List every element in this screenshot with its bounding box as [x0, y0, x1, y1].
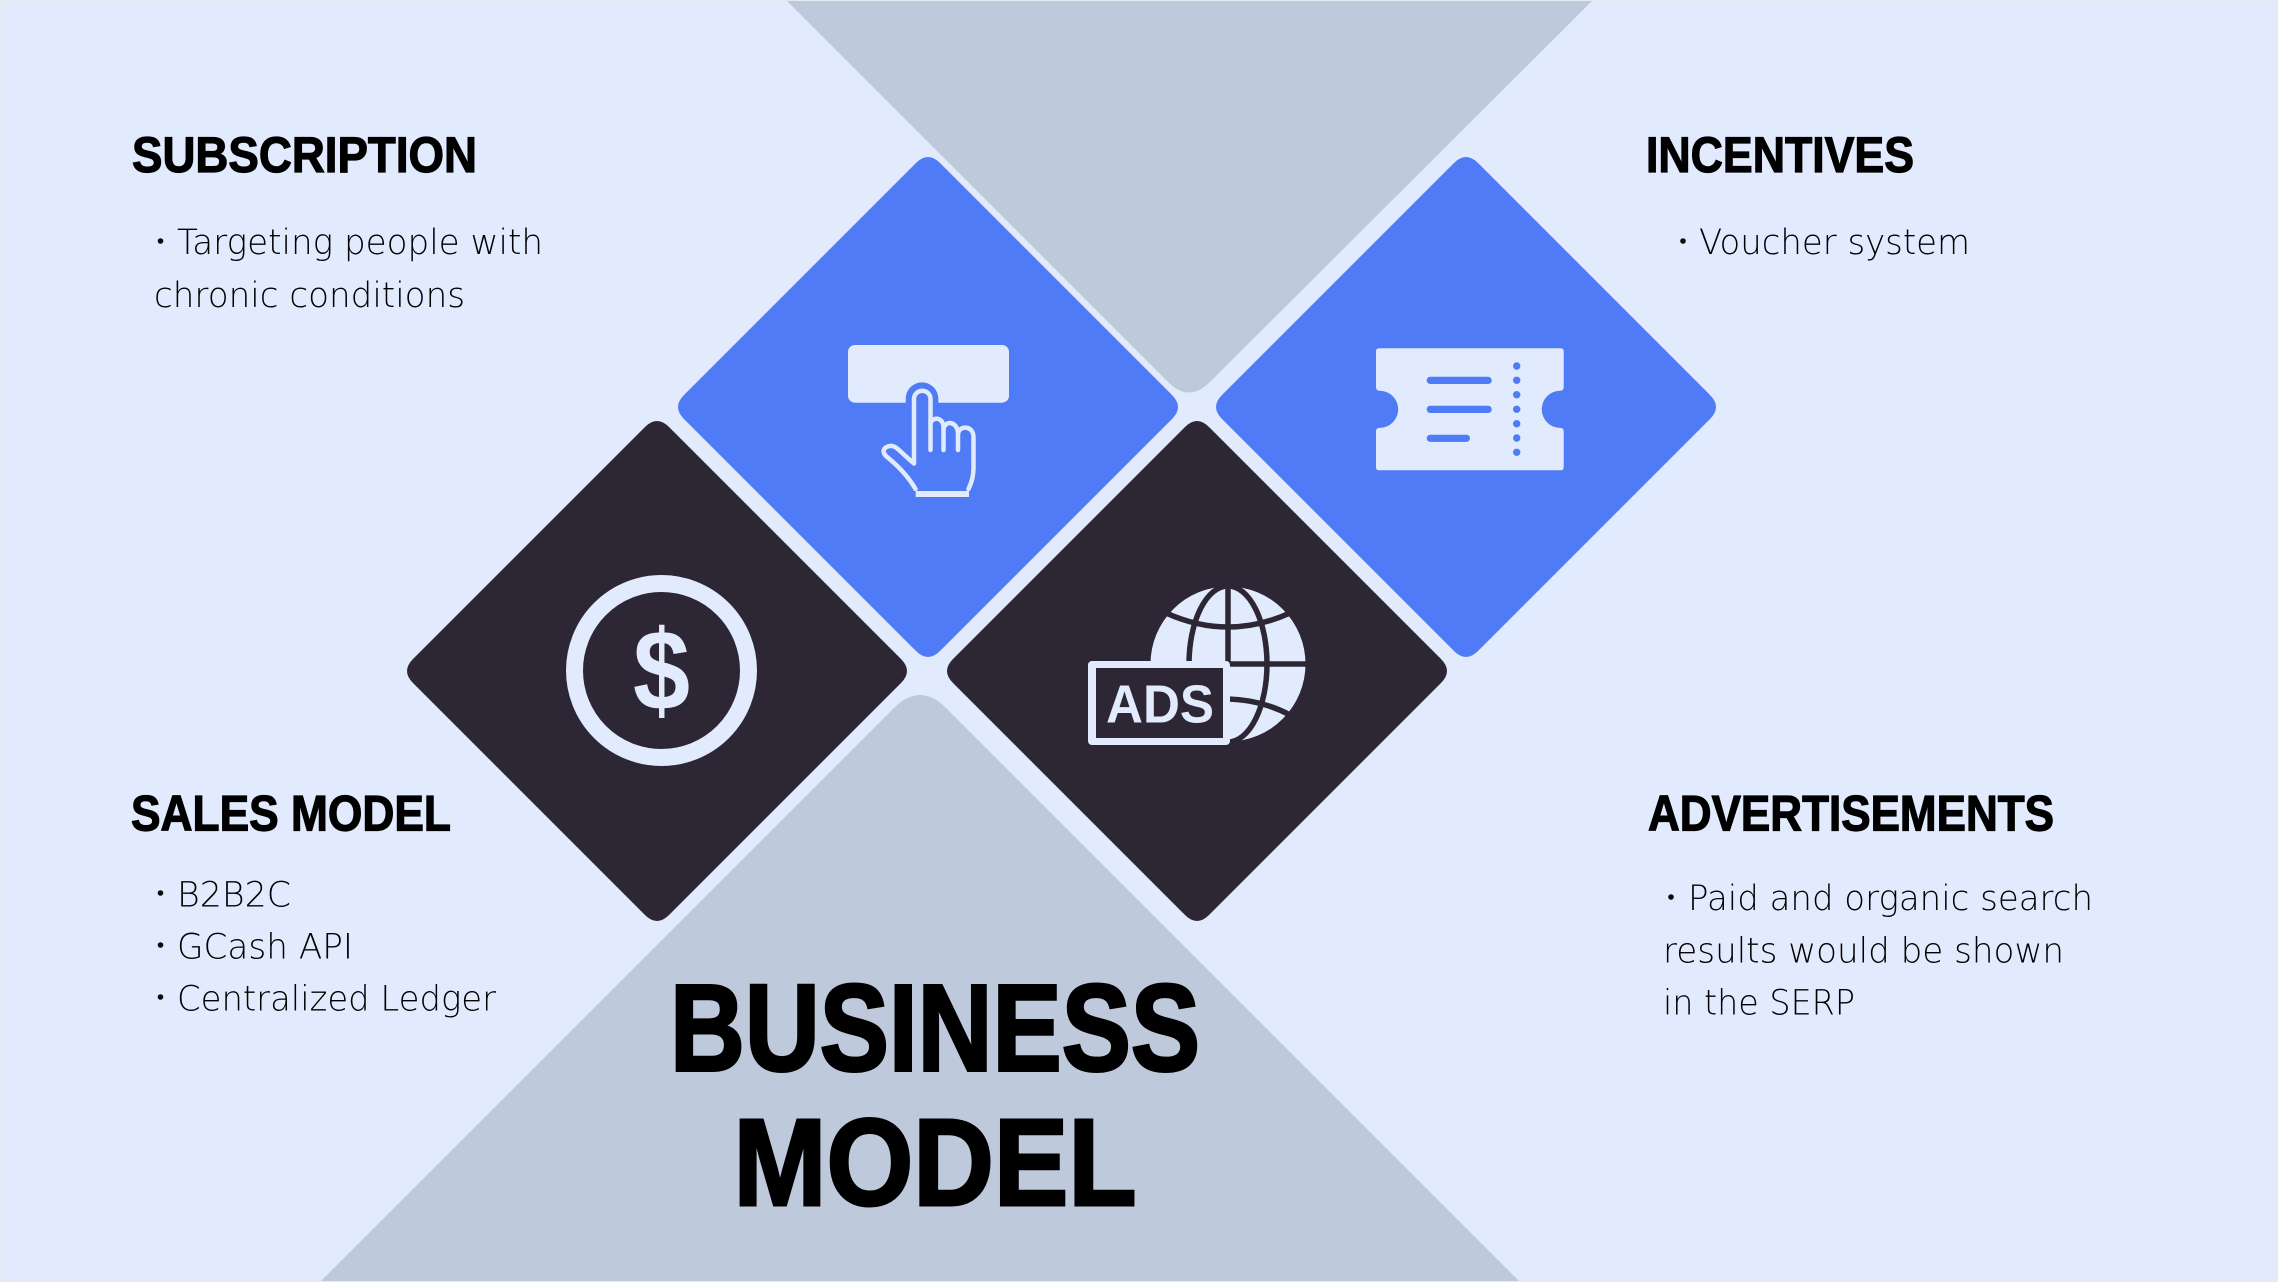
icon: dollar coin — [574, 584, 748, 758]
bottom triangle — [321, 695, 1519, 1281]
text block: advertisements details: in the SERP — [1663, 984, 1855, 1024]
text block: incentives details: Voucher system — [1699, 223, 1970, 263]
heading: advertisements: ADVERTISEMENTS — [1648, 786, 2054, 842]
panel: blue diamond incentives — [1216, 157, 1716, 657]
icon: globe with ads label: ADS — [1106, 675, 1214, 735]
panel: dark diamond sales model — [407, 421, 907, 921]
title — [670, 960, 1200, 1232]
icon: dollar coin: $ — [633, 608, 690, 734]
text block: sales model details: GCash API — [177, 928, 353, 968]
icon: ticket — [1376, 348, 1564, 470]
title: MODEL — [734, 1095, 1136, 1232]
text block: sales model details: Centralized Ledger — [177, 980, 497, 1020]
text block: sales model details — [158, 876, 497, 1020]
heading: incentives: INCENTIVES — [1646, 127, 1914, 183]
heading: subscription: SUBSCRIPTION — [132, 127, 477, 183]
top triangle — [787, 1, 1592, 392]
text block: advertisements details — [1663, 879, 2093, 1024]
text block: subscription details: chronic conditions — [154, 276, 465, 316]
text block: subscription details: Targeting people with — [177, 223, 543, 263]
icon: hand pressing button — [848, 345, 1009, 497]
heading: sales model: SALES MODEL — [131, 786, 451, 842]
text block: advertisements details: results would be shown — [1663, 931, 2064, 971]
panel: dark diamond advertisements — [947, 421, 1447, 921]
text block: subscription details — [154, 223, 543, 316]
icon: globe with ads label — [1088, 584, 1310, 745]
panel: blue diamond subscription — [678, 157, 1178, 657]
text block: sales model details: B2B2C — [177, 876, 291, 916]
title: BUSINESS — [670, 960, 1200, 1098]
text block: advertisements details: Paid and organic search — [1688, 879, 2093, 919]
